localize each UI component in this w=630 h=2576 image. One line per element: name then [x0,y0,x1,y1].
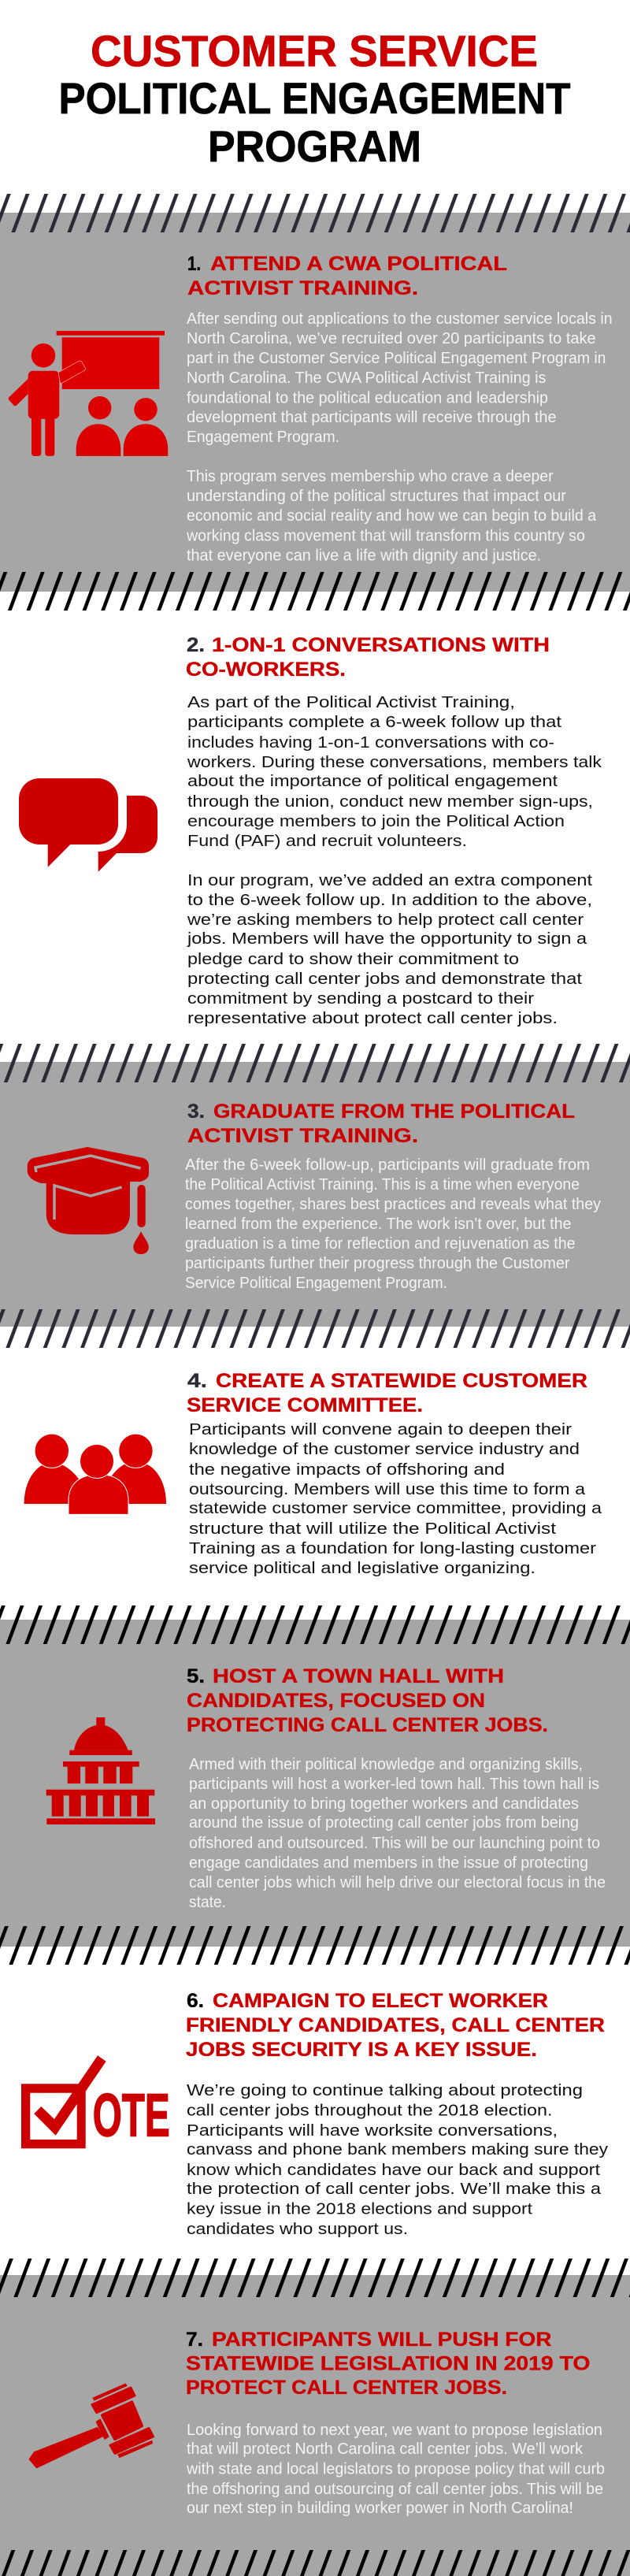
text block: step 5: offshored and outsourced. This will be our launching point to [189,1834,600,1852]
text block: step 1: part in the Customer Service Political Engagement Program in [187,349,606,367]
text block: step 4: statewide customer service committee, providing a [189,1499,602,1517]
text block: step 3: graduation is a time for reflection and rejuvenation as the [185,1234,576,1253]
gray band: step 5 [0,1620,630,1947]
heading: step 6 [186,1990,605,2061]
text block: step 6: candidates who support us. [187,2220,408,2238]
text block: step 4: Training as a foundation for long-lasting customer [189,1539,596,1557]
icon: group of three people [24,1434,166,1514]
text block: step 6: call center jobs throughout the 2018 election. [187,2102,553,2119]
text block: step 1: development that participants will receive through the [187,408,557,426]
text block: step 2: to the 6-week follow up. In addition to the above, [187,891,592,909]
text block: step 1: This program serves membership who crave a deeper [187,467,554,485]
text block: step 3: Service Political Engagement Program. [185,1274,447,1292]
gray band: step 3 [0,1062,630,1327]
text block: step 1: economic and social reality and how we can begin to build a [187,507,597,525]
heading: step 1: ATTEND A CWA POLITICAL [210,253,507,275]
icon: vote checkbox [21,2055,170,2150]
panel: step 4 committee [24,1370,602,1577]
text block: step 7: Looking forward to next year, we want to propose legislation [187,2421,602,2439]
text block: step 6: canvass and phone bank members making sure they [187,2140,609,2158]
text block: step 1: Engagement Program. [187,428,339,446]
text block: step 2: pledge card to show their commitment to [187,950,519,968]
panel: step 6 campaign [21,1990,609,2238]
heading: step 5: HOST A TOWN HALL WITH [213,1665,504,1687]
text block: step 2: through the union, conduct new member sign-ups, [187,792,593,811]
text block: step 6: know which candidates have our back and support [187,2161,600,2179]
heading: step 1: ACTIVIST TRAINING. [187,277,418,299]
title: POLITICAL ENGAGEMENT [58,73,570,123]
heading: step 1: 1. [187,253,201,275]
text block: step 6: Participants will have worksite conversations, [187,2121,558,2140]
title [58,26,570,171]
icon: vote checkbox: OTE [93,2082,170,2150]
text block: step 4: outsourcing. Members will use this time to form a [189,1480,586,1498]
gray band: step 7 [0,2275,630,2576]
text block: step 5: Armed with their political knowledge and organizing skills, [189,1755,583,1773]
text block: step 7 [186,2421,605,2517]
title: CUSTOMER SERVICE [91,26,538,76]
heading: step 3: 3. [187,1101,205,1123]
title: PROGRAM [208,121,421,171]
text block: step 2: representative about protect call center jobs. [187,1009,558,1027]
heading: step 3: GRADUATE FROM THE POLITICAL [213,1101,575,1123]
text block: step 2: commitment by sending a postcard to their [187,989,534,1008]
heading: step 7: PARTICIPANTS WILL PUSH FOR [212,2329,551,2351]
icon: capitol building [46,1717,155,1824]
text block: step 2: protecting call center jobs and demonstrate that [187,970,582,988]
icon: presenter at board with audience [9,331,168,456]
text block: step 2: includes having 1-on-1 conversations with co- [187,733,554,752]
text block: step 1: understanding of the political structures that impact our [187,487,566,505]
text block: step 7: with state and local legislators to propose policy that will curb [186,2459,605,2478]
text block: step 1: North Carolina, we’ve recruited over 20 participants to take [187,329,596,347]
text block: step 2: encourage members to join the Political Action [187,812,565,830]
heading: step 2: 2. [187,634,205,656]
gray band: step 1 [0,213,630,592]
text block: step 5: around the issue of protecting call center jobs from being [189,1813,579,1832]
text block: step 1: working class movement that will transform this country so [186,526,585,545]
heading: step 2 [186,634,550,681]
text block: step 3: comes together, shares best practices and reveals what they [185,1195,602,1213]
text block: step 2: In our program, we’ve added an extra component [187,871,592,889]
text block: step 2: participants complete a 6-week follow up that [187,713,561,731]
text block: step 1: that everyone can live a life with dignity and justice. [187,547,541,564]
heading: step 2: CO-WORKERS. [186,659,346,681]
text block: step 4: service political and legislative organizing. [189,1559,536,1577]
text block: step 5: engage candidates and members in the issue of protecting [189,1854,588,1872]
text block: step 3: participants further their progress through the Customer [185,1254,570,1272]
text block: step 2: As part of the Political Activist Training, [187,693,515,711]
text block: step 5: participants will host a worker-led town hall. This town hall is [189,1775,599,1793]
text block: step 3 [185,1156,602,1292]
heading: step 7: 7. [186,2329,203,2351]
text block: step 3: After the 6-week follow-up, participants will graduate from [185,1156,590,1174]
text block: step 2: workers. During these conversations, members talk [187,753,602,771]
text block: step 1: North Carolina. The CWA Political Activist Training is [187,369,546,387]
heading: step 1 [187,253,507,299]
heading: step 6: CAMPAIGN TO ELECT WORKER [213,1990,548,2012]
panel: step 2 conversations [19,634,602,1027]
heading: step 3 [187,1101,575,1147]
heading: step 4 [187,1370,587,1416]
text block: step 5: state. [189,1893,226,1911]
text block: step 5: call center jobs which will help drive our electoral focus in the [189,1873,606,1891]
text block: step 2: jobs. Members will have the opportunity to sign a [187,930,587,948]
heading: step 6: 6. [187,1990,204,2012]
heading: step 7 [186,2329,591,2399]
heading: step 7: PROTECT CALL CENTER JOBS. [186,2377,507,2399]
heading: step 7: STATEWIDE LEGISLATION IN 2019 TO [186,2352,591,2374]
heading: step 6: JOBS SECURITY IS A KEY ISSUE. [186,2039,537,2061]
heading: step 4: SERVICE COMMITTEE. [187,1394,423,1416]
text block: step 2: Fund (PAF) and recruit volunteers. [187,832,467,850]
panel: step 5 town hall [46,1665,606,1911]
text block: step 1 [186,310,613,564]
heading: step 6: FRIENDLY CANDIDATES, CALL CENTER [186,2014,605,2036]
text block: step 2: about the importance of political engagement [187,772,558,790]
text block: step 4: structure that will utilize the Political Activist [189,1520,556,1538]
text block: step 6 [187,2081,609,2238]
text block: step 4 [189,1420,602,1577]
text block: step 2: we’re asking members to help protect call center [187,911,584,929]
text block: step 5 [189,1755,606,1911]
text block: step 1: After sending out applications to the customer service locals in [187,310,613,328]
heading: step 5: PROTECTING CALL CENTER JOBS. [187,1714,548,1736]
icon: graduation cap [28,1147,149,1254]
heading: step 5: 5. [187,1665,205,1687]
heading: step 5: CANDIDATES, FOCUSED ON [187,1690,485,1712]
text block: step 1: foundational to the political education and leadership [187,389,548,406]
heading: step 4: 4. [187,1370,207,1392]
text block: step 3: the Political Activist Training. This is a time when everyone [185,1175,580,1193]
text block: step 7: our next step in building worker power in North Carolina! [187,2499,573,2517]
heading: step 2: 1-ON-1 CONVERSATIONS WITH [212,634,550,656]
text block: step 6: We’re going to continue talking about protecting [187,2081,583,2099]
icon: gavel [30,2384,153,2467]
text block: step 4: the negative impacts of offshoring and [189,1461,505,1479]
text block: step 6: key issue in the 2018 elections and support [187,2199,532,2218]
text block: step 2 [187,693,602,1027]
heading: step 5 [187,1665,548,1736]
text block: step 7: the offshoring and outsourcing of call center jobs. This will be [187,2480,603,2498]
text block: step 6: the protection of call center jobs. We’ll make this a [187,2180,602,2198]
panel: step 7 legislation [30,2329,605,2517]
icon: speech bubbles [19,778,158,872]
heading: step 3: ACTIVIST TRAINING. [187,1125,418,1147]
text block: step 7: that will protect North Carolina call center jobs. We’ll work [187,2440,584,2458]
heading: step 4: CREATE A STATEWIDE CUSTOMER [216,1370,587,1392]
panel: step 3 graduate [28,1101,602,1292]
text block: step 4: Participants will convene again to deepen their [189,1420,572,1438]
panel: step 1 attend training [9,253,613,564]
text block: step 3: learned from the experience. The work isn’t over, but the [185,1215,572,1233]
text block: step 4: knowledge of the customer service industry and [189,1440,580,1458]
text block: step 5: an opportunity to bring together workers and candidates [189,1795,579,1813]
